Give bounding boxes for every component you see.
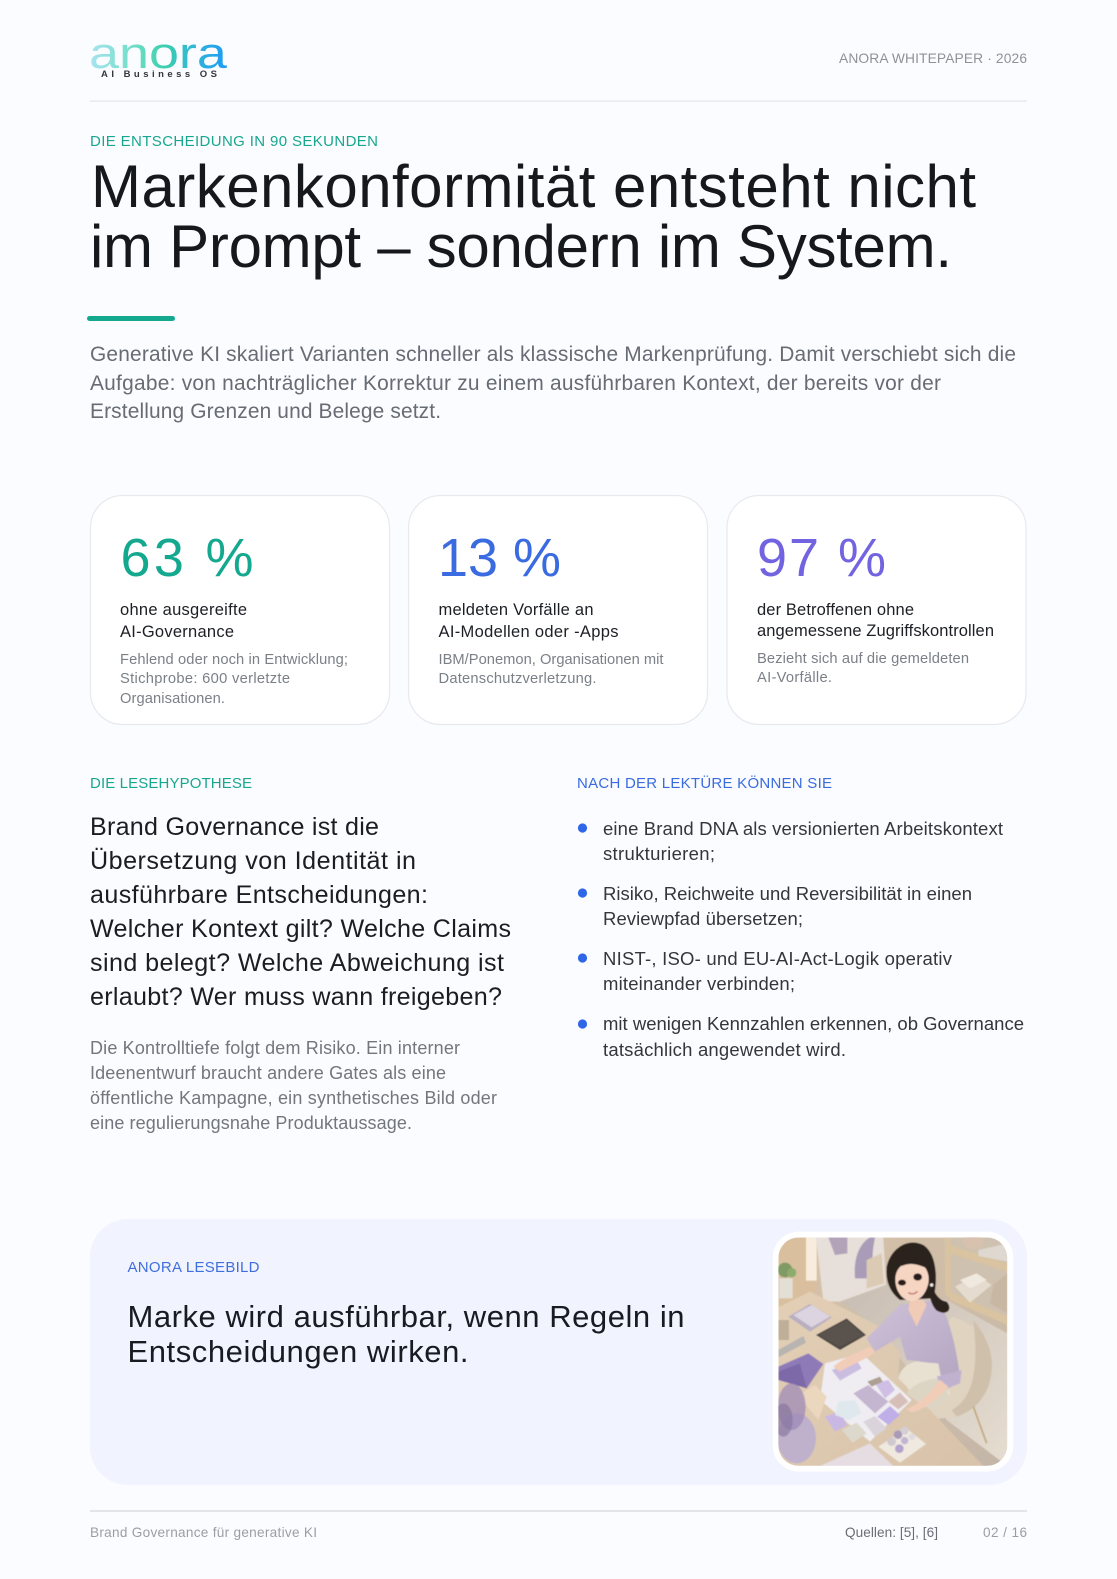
accent bar (87, 316, 175, 321)
supporting paragraph: öffentliche Kampagne, ein synthetisches Bild oder (90, 1088, 497, 1108)
stat label: AI-Modellen oder -Apps (438, 623, 618, 641)
list item 2: Risiko, Reichweite und Reversibilität in einen (603, 883, 972, 904)
lead paragraph: Aufgabe: von nachträglicher Korrektur zu einem ausführbaren Kontext, der bereits vor der (90, 372, 941, 395)
stat card: 97 % (727, 496, 1026, 724)
list item 1: eine Brand DNA als versionierten Arbeitskontext (603, 818, 1003, 839)
hypothesis statement: ausführbare Entscheidungen: (90, 881, 428, 909)
footer (90, 1510, 1027, 1540)
title (90, 153, 976, 280)
supporting paragraph (90, 1038, 497, 1133)
section: Nach der Lektüre können Sie (577, 774, 1024, 1060)
stat label (438, 601, 618, 641)
stat label (757, 601, 994, 640)
list item 4 (578, 1013, 1024, 1060)
section: Die Lesehypothese (90, 775, 511, 1133)
hypothesis statement: Übersetzung von Identität in (90, 847, 416, 875)
stat note: AI-Vorfälle. (757, 670, 832, 686)
stat number: 13 % (438, 528, 561, 588)
stat number: 63 % (120, 528, 254, 588)
stat number: 97 % (757, 528, 886, 588)
header (89, 29, 1027, 102)
stat label: ohne ausgereifte (120, 601, 247, 619)
logo: anora: AI Business OS (101, 69, 217, 80)
list item 1 (578, 818, 1003, 864)
panel statement: Marke wird ausführbar, wenn Regeln in (128, 1299, 684, 1334)
title: Markenkonformität entsteht nicht (91, 153, 976, 220)
hypothesis statement (90, 813, 511, 1011)
supporting paragraph: Die Kontrolltiefe folgt dem Risiko. Ein interner (90, 1038, 460, 1058)
stat label: der Betroffenen ohne (757, 601, 914, 619)
hypothesis statement: Brand Governance ist die (90, 813, 379, 841)
stat note: Datenschutzverletzung. (438, 671, 596, 687)
lead paragraph (90, 343, 1016, 423)
lead paragraph: Generative KI skaliert Varianten schneller als klassische Markenprüfung. Damit verschiebt sich die (90, 343, 1016, 366)
panel: Anora Lesebild (90, 1219, 1027, 1485)
eyebrow: DIE ENTSCHEIDUNG IN 90 SEKUNDEN (90, 133, 378, 150)
panel label: ANORA LESEBILD (128, 1259, 260, 1276)
list item 4: mit wenigen Kennzahlen erkennen, ob Governance (603, 1013, 1024, 1034)
footer title: Brand Governance für generative KI (90, 1525, 317, 1540)
stat label (120, 601, 247, 641)
sources: Quellen: [5], [6] (845, 1525, 938, 1540)
panel statement: Entscheidungen wirken. (128, 1334, 468, 1369)
stat card: 13 % (408, 496, 708, 724)
lead paragraph: Erstellung Grenzen und Belege setzt. (90, 400, 441, 423)
stat label: angemessene Zugriffskontrollen (757, 622, 994, 640)
list item 3: NIST-, ISO- und EU-AI-Act-Logik operativ (603, 948, 953, 969)
hypothesis statement: sind belegt? Welche Abweichung ist (90, 949, 504, 977)
stat note (757, 651, 969, 686)
list item 2: Reviewpfad übersetzen; (603, 908, 803, 929)
stat note (438, 652, 664, 687)
stat label: meldeten Vorfälle an (438, 601, 594, 619)
title: im Prompt – sondern im System. (90, 213, 952, 280)
supporting paragraph: Ideenentwurf braucht andere Gates als eine (90, 1063, 446, 1083)
illustration: woman arranging a brand moodboard at a desk (773, 1232, 1013, 1472)
stat note: Bezieht sich auf die gemeldeten (757, 651, 969, 667)
stat card: 63 % (90, 496, 390, 724)
hypothesis statement: erlaubt? Wer muss wann freigeben? (90, 983, 502, 1011)
hypothesis statement: Welcher Kontext gilt? Welche Claims (90, 915, 511, 943)
stat note: IBM/Ponemon, Organisationen mit (438, 652, 664, 668)
header label: ANORA WHITEPAPER · 2026 (839, 51, 1027, 66)
list item 1: strukturieren; (603, 843, 715, 864)
logo: anora: anora (89, 29, 228, 78)
page number: 02 / 16 (983, 1525, 1027, 1540)
list item 2 (578, 883, 972, 929)
list item 4: tatsächlich angewendet wird. (603, 1039, 846, 1060)
section heading: DIE LESEHYPOTHESE (90, 775, 252, 792)
stat note (120, 652, 348, 707)
section heading: NACH DER LEKTÜRE KÖNNEN SIE (577, 774, 832, 792)
panel statement (128, 1299, 684, 1369)
list item 3 (578, 948, 953, 994)
stat note: Fehlend oder noch in Entwicklung; (120, 652, 348, 668)
supporting paragraph: eine regulierungsnahe Produktaussage. (90, 1113, 412, 1133)
stat note: Stichprobe: 600 verletzte (120, 671, 290, 687)
stat label: AI-Governance (120, 623, 234, 641)
list item 3: miteinander verbinden; (603, 973, 795, 994)
stat note: Organisationen. (120, 691, 225, 707)
